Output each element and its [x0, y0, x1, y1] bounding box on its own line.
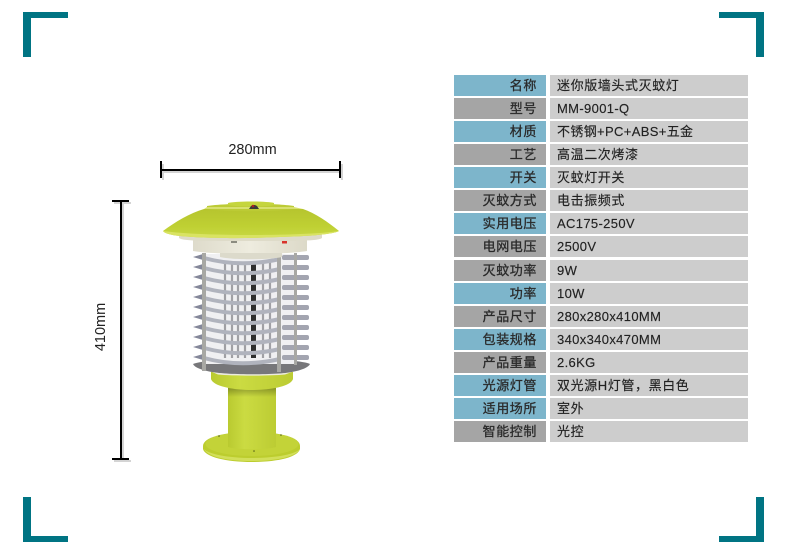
row: 实用电压 [454, 213, 748, 234]
corner bracket: top right [719, 12, 764, 57]
row: 电网电压: 2500V [557, 239, 596, 254]
lamp support rods [202, 253, 297, 372]
row: 功率 [454, 283, 748, 304]
lamp base plate [203, 432, 300, 462]
row: 灭蚊功率: 9W [557, 263, 577, 278]
row: 灭蚊方式: 电击振频式 [557, 193, 625, 208]
row: 包装规格 [454, 329, 748, 350]
lamp column [228, 386, 276, 449]
height dimension: 410mm: 410mm [93, 303, 109, 351]
width dimension: 280mm: 280mm [228, 142, 277, 158]
product: mosquito killer lamp [163, 202, 339, 462]
row: 名称: 名称 [510, 78, 537, 93]
row: 材质 [454, 121, 748, 142]
lamp green cap [163, 202, 339, 238]
row: 适用场所: 适用场所 [483, 401, 537, 416]
row: 灭蚊功率: 灭蚊功率 [483, 263, 537, 278]
row: 材质: 材质 [510, 124, 537, 139]
row: 名称 [454, 75, 748, 96]
row: 开关: 开关 [510, 170, 537, 185]
row: 材质: 不锈钢+PC+ABS+五金 [557, 124, 693, 139]
row: 型号: MM-9001-Q [557, 101, 630, 116]
row: 产品重量: 2.6KG [557, 355, 596, 370]
row: 光源灯管 [454, 375, 748, 396]
row: 灭蚊方式 [454, 190, 748, 211]
row: 智能控制 [454, 421, 748, 442]
row: 适用场所 [454, 398, 748, 419]
row: 工艺: 高温二次烤漆 [557, 147, 639, 162]
row: 工艺 [454, 144, 748, 165]
row: 产品尺寸 [454, 306, 748, 327]
row: 产品重量: 产品重量 [483, 355, 537, 370]
row: 光源灯管: 光源灯管 [483, 378, 537, 393]
row: 开关 [454, 167, 748, 188]
lamp cap indicator [249, 205, 259, 209]
row: 电网电压 [454, 236, 748, 257]
lamp cream body [179, 234, 322, 259]
row: 实用电压: 实用电压 [483, 216, 537, 231]
row: 适用场所: 室外 [557, 401, 584, 416]
row: 型号: 型号 [510, 101, 537, 116]
row: 产品尺寸: 280x280x410MM [557, 309, 661, 324]
row: 包装规格: 340x340x470MM [557, 332, 661, 347]
row: 实用电压: AC175-250V [557, 216, 635, 231]
lamp green collar [211, 372, 293, 390]
specification table [454, 75, 748, 442]
lamp left fin tips [193, 254, 203, 360]
lamp inner tube [204, 254, 296, 364]
row: 型号 [454, 98, 748, 119]
row: 产品尺寸: 产品尺寸 [483, 309, 537, 324]
row: 光源灯管: 双光源H灯管，黑白色 [557, 378, 689, 393]
height dimension: 410mm [93, 201, 131, 461]
width dimension: 280mm [161, 142, 342, 180]
lamp front curved wires [204, 258, 280, 363]
row: 包装规格: 包装规格 [483, 332, 537, 347]
lamp bottom plate [193, 360, 310, 376]
row: 智能控制: 光控 [557, 424, 584, 439]
lamp right fins [282, 255, 309, 360]
row: 灭蚊方式: 灭蚊方式 [483, 193, 537, 208]
row: 功率: 10W [557, 286, 585, 301]
row: 工艺: 工艺 [510, 147, 537, 162]
row: 开关: 灭蚊灯开关 [557, 170, 625, 185]
row: 灭蚊功率 [454, 260, 748, 281]
row: 智能控制: 智能控制 [483, 424, 537, 439]
row: 名称: 迷你版墙头式灭蚊灯 [557, 78, 679, 93]
corner bracket: bottom left [23, 497, 68, 542]
row: 产品重量 [454, 352, 748, 373]
corner bracket: bottom right [719, 497, 764, 542]
row: 电网电压: 电网电压 [483, 239, 537, 254]
row: 功率: 功率 [510, 286, 537, 301]
corner bracket: top left [23, 12, 68, 57]
